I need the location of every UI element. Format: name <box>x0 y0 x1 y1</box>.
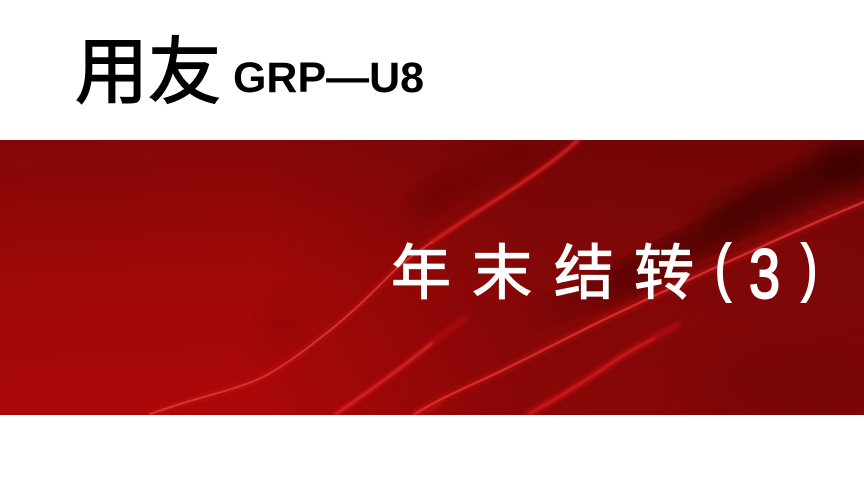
title number: (3): ( <box>715 232 731 303</box>
heading: product name <box>75 32 424 113</box>
light streak A <box>150 140 578 414</box>
heading: 用友: 用友 <box>75 32 221 113</box>
title number: (3): 3 <box>749 236 780 313</box>
title number: (3): ) <box>802 232 817 303</box>
slide <box>0 34 864 415</box>
light streak C <box>529 325 678 414</box>
panel: red silk banner <box>0 131 864 415</box>
dark fold shadows <box>266 140 864 340</box>
heading: GRP—U8: GRP—U8 <box>233 54 424 102</box>
light streak B <box>415 202 864 414</box>
light streak D <box>336 318 465 414</box>
title: 年末结转: 年末结转 <box>391 240 694 307</box>
title number: (3) <box>717 242 816 303</box>
